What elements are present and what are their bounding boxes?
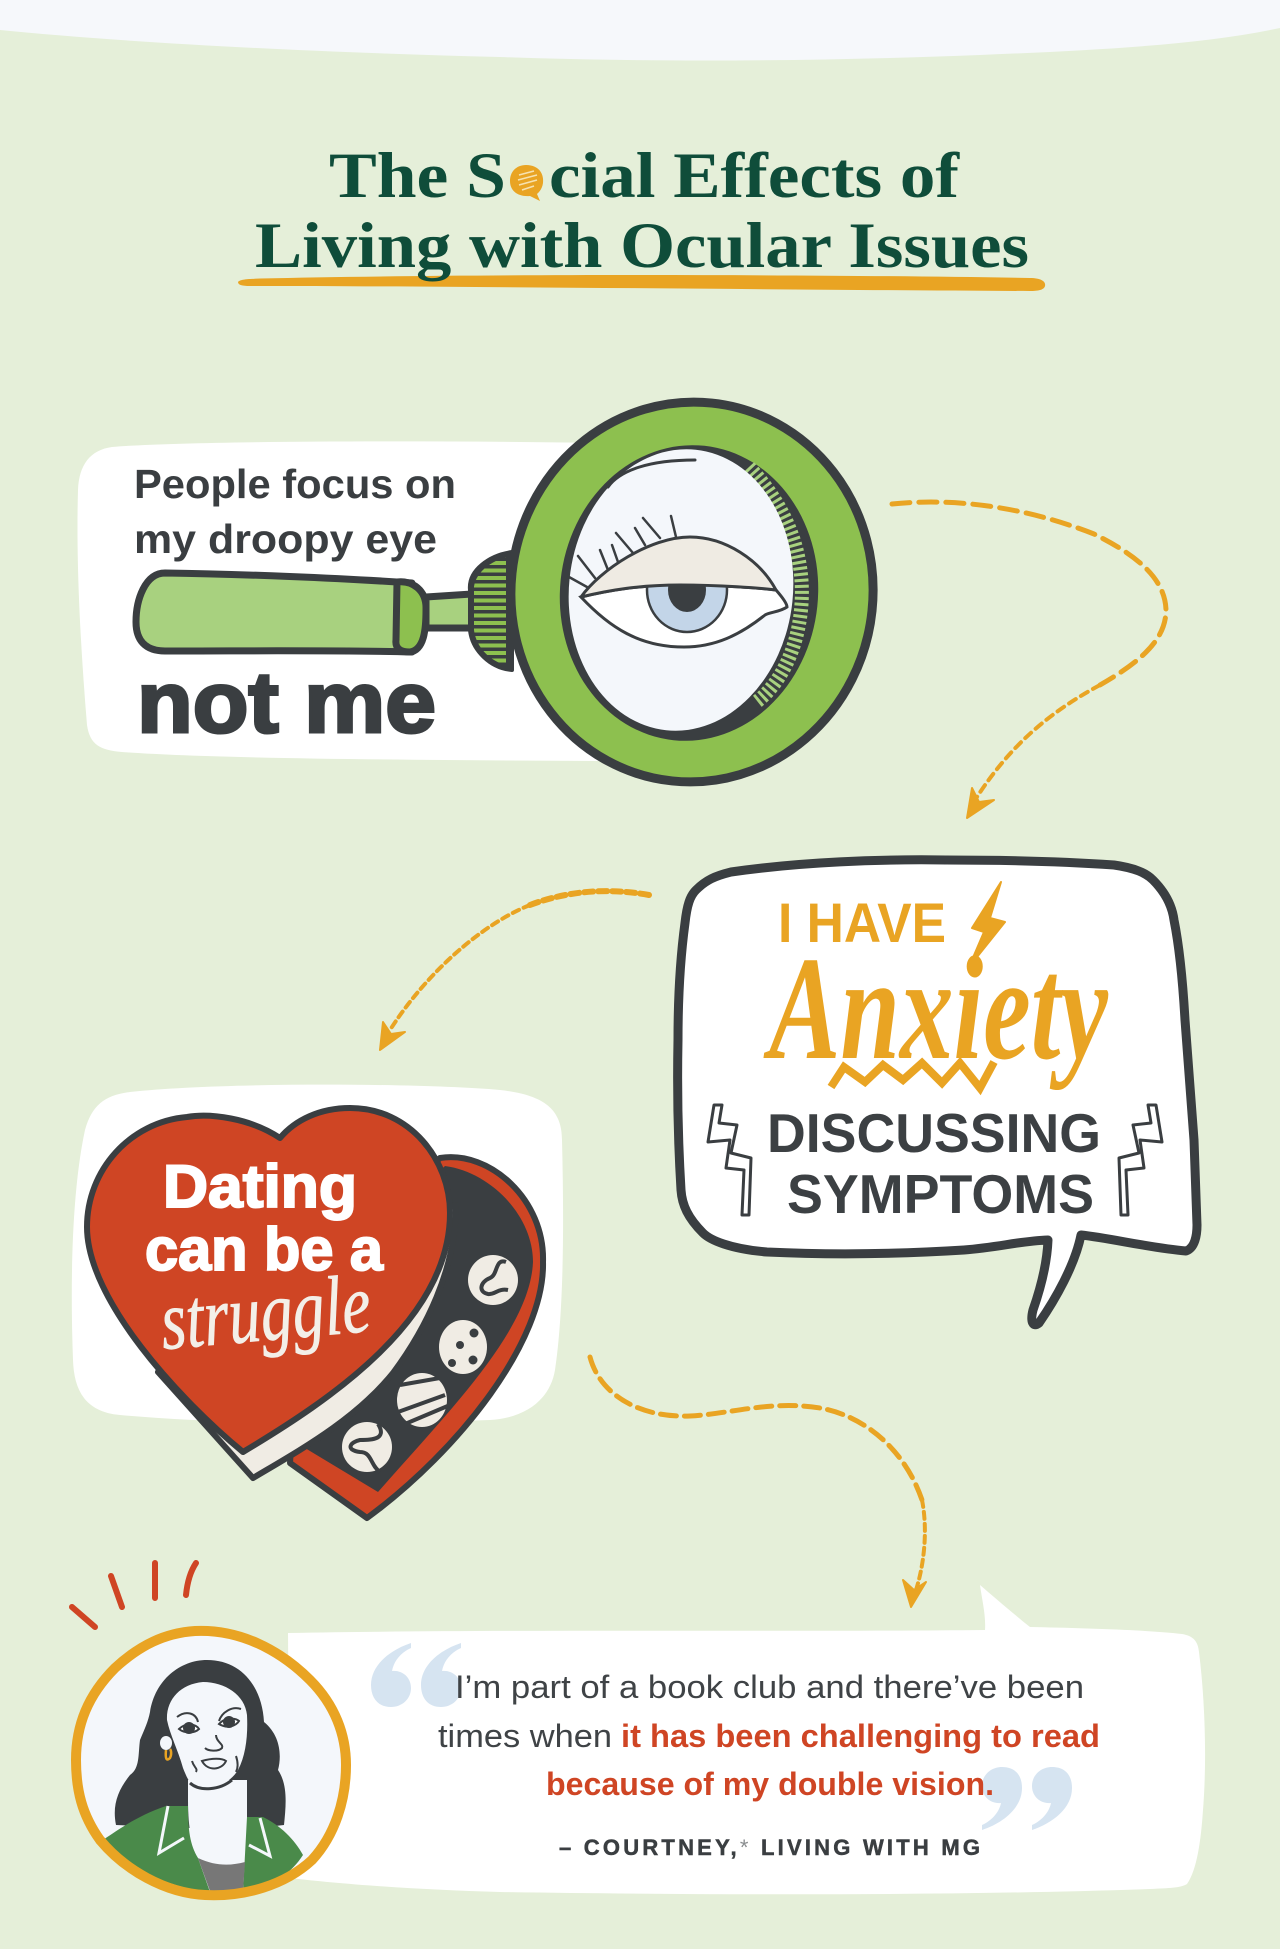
- icon: right jolt: [1119, 1105, 1162, 1215]
- text: people focus on my droopy eye: People focus on: [134, 461, 456, 507]
- gray top: [198, 1858, 245, 1891]
- icon: chocolate box lid: [87, 1108, 456, 1478]
- icon: speech bubble letter o: [510, 165, 543, 201]
- arrow: heart to quote: [590, 1357, 926, 1607]
- title underline: [238, 275, 1045, 291]
- quote text: times when: [438, 1718, 612, 1754]
- icon: left jolt: [708, 1105, 751, 1215]
- text: discussing symptoms: DISCUSSING: [767, 1102, 1101, 1164]
- panel: anxiety speech bubble: [678, 860, 1197, 1325]
- collar lines: [159, 1806, 270, 1856]
- text: struggle: struggle: [157, 1257, 374, 1368]
- icon: chocolate box base: [290, 1157, 543, 1518]
- title: The S: [329, 140, 506, 212]
- text: anxiety: Anxiety: [763, 927, 1109, 1091]
- panel: droopy eye: [77, 384, 892, 800]
- chocolate: swirl bottom: [342, 1422, 392, 1472]
- text: discussing symptoms: [767, 1102, 1101, 1225]
- icon: zigzag: [831, 1062, 994, 1088]
- arrow: speech bubble to heart: [380, 891, 649, 1050]
- chocolate: swirl top: [468, 1255, 518, 1305]
- text: people focus on my droopy eye: [134, 461, 456, 562]
- panel: dating heart: [72, 1085, 563, 1518]
- text: people focus on my droopy eye: my droopy eye: [134, 516, 437, 562]
- icon: closing quote mark: [982, 1767, 1072, 1830]
- quote text: I’m part of a book club and there’ve been: [455, 1669, 1084, 1705]
- ear and earring: [160, 1736, 172, 1759]
- quote text: [438, 1669, 1100, 1802]
- icon: droopy eye: [569, 516, 787, 647]
- speech bubble outline: [678, 860, 1197, 1325]
- icon: magnifying glass handle: [136, 552, 512, 670]
- quote bubble: [288, 1585, 1205, 1894]
- text: not me: not me: [137, 655, 436, 751]
- text: dating can be a: [145, 1153, 384, 1283]
- icon: magnifying glass lens: [492, 384, 892, 800]
- title: cial Effects of: [549, 140, 960, 212]
- jacket: [103, 1806, 303, 1892]
- quote attribution: – COURTNEY,* LIVING WITH MG: [559, 1835, 980, 1860]
- panel background: [72, 1085, 563, 1423]
- text: discussing symptoms: SYMPTOMS: [787, 1163, 1094, 1225]
- facial features: [177, 1708, 241, 1789]
- icon: lightning bolt: [969, 882, 1005, 967]
- panel background: [77, 441, 600, 761]
- text: dating can be a: can be a: [145, 1216, 384, 1283]
- icon: opening quote mark: [371, 1643, 461, 1707]
- arrow: magnifier to speech bubble: [892, 502, 1166, 818]
- text: I have: I HAVE: [778, 891, 946, 954]
- chocolate: striped: [397, 1373, 450, 1427]
- portrait: Courtney: [72, 1563, 346, 1895]
- chocolate: dotted: [439, 1320, 487, 1374]
- portrait circle: [76, 1631, 346, 1895]
- title: [255, 140, 1029, 282]
- text: dating can be a: Dating: [163, 1153, 357, 1220]
- face: [167, 1682, 247, 1788]
- panel: quote: [288, 1585, 1205, 1894]
- title: Living with Ocular Issues: [255, 210, 1029, 282]
- portrait ring: [76, 1631, 346, 1895]
- neck: [188, 1780, 247, 1865]
- icon: attention rays: [72, 1563, 196, 1627]
- quote text: it has been challenging to read: [621, 1718, 1100, 1754]
- quote text: because of my double vision.: [546, 1766, 994, 1802]
- hair: [115, 1660, 286, 1830]
